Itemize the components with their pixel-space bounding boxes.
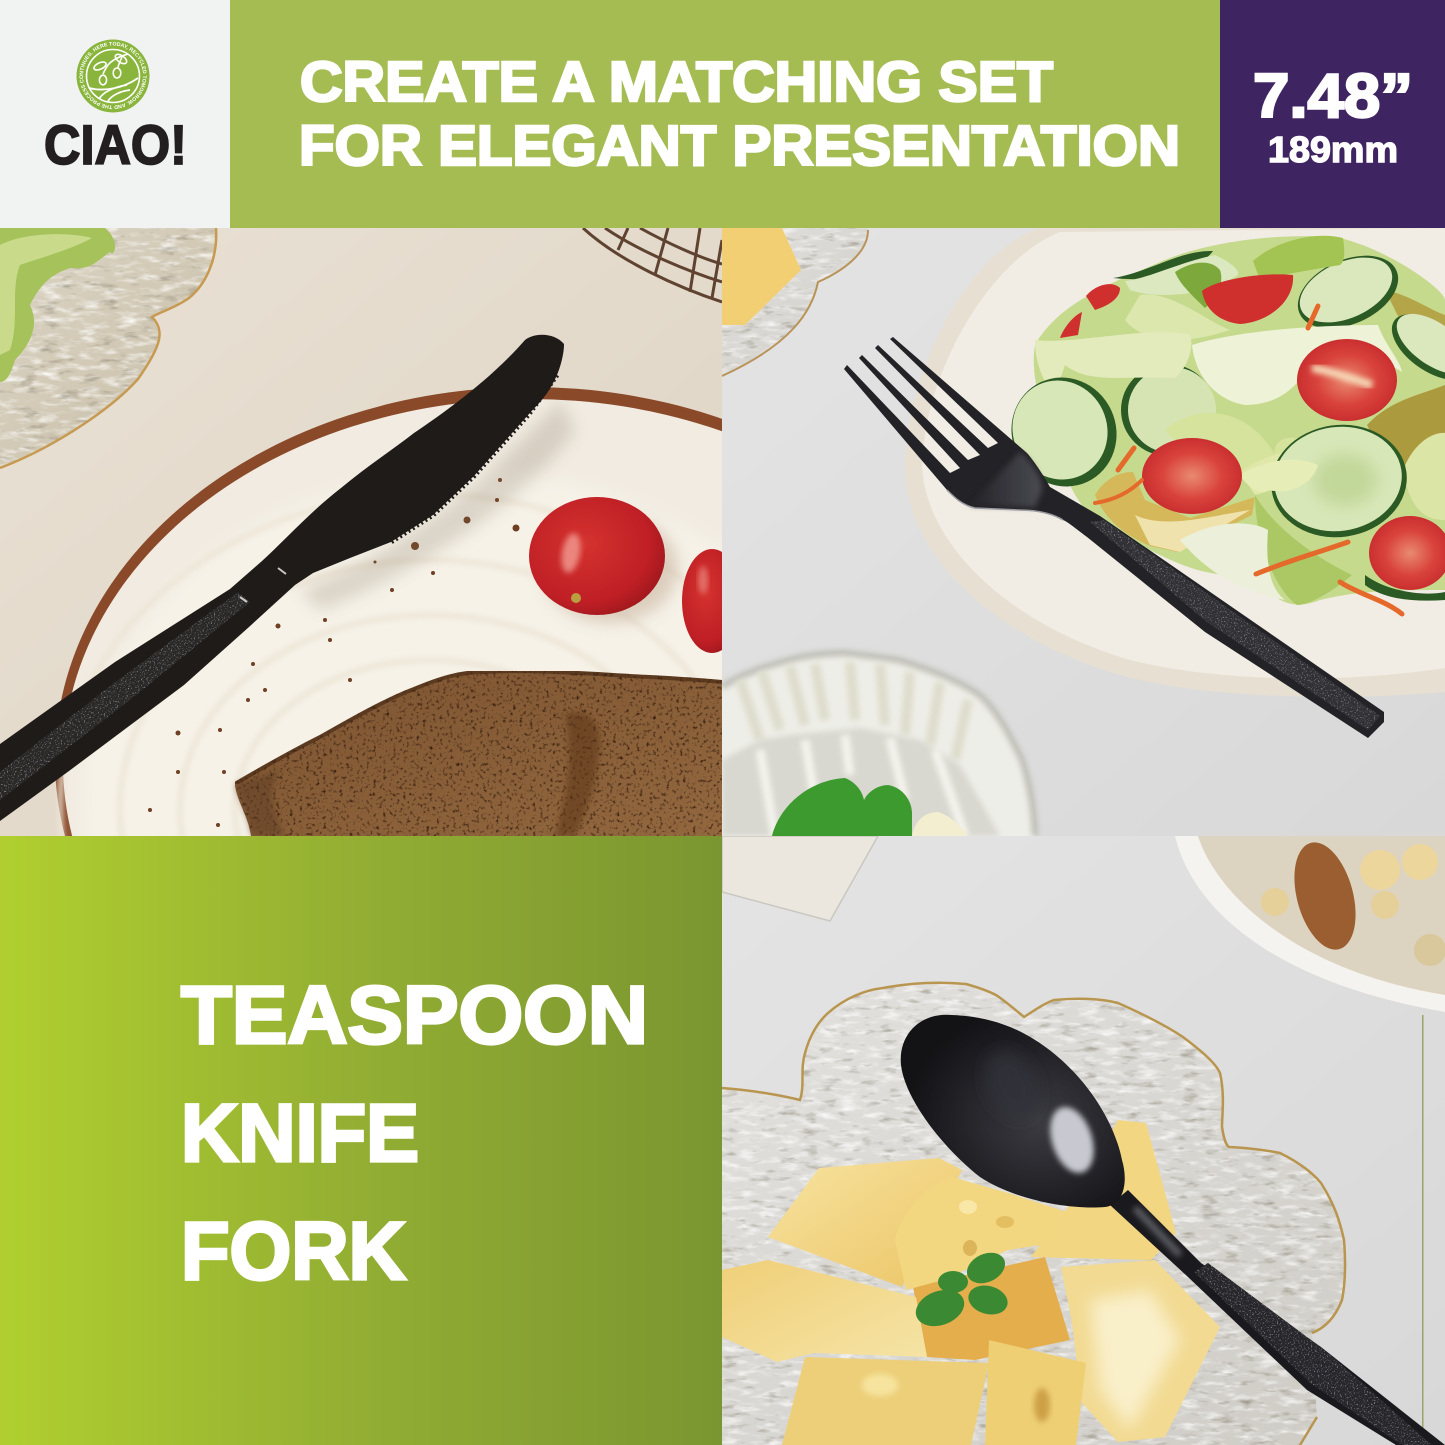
tomatoes [529, 497, 742, 653]
small glass dish with pineapple [722, 228, 868, 376]
lettuce over cucumber [1240, 460, 1318, 492]
item: teaspoon: TEASPOON [181, 970, 648, 1061]
carrot strips [1095, 306, 1402, 614]
oat bowl [1175, 836, 1445, 1012]
length in inches: 7.48” [1253, 62, 1413, 131]
knife shadow [300, 400, 575, 610]
salad plate [905, 228, 1445, 697]
wire basket [583, 228, 722, 302]
knife [0, 335, 564, 821]
headline: FOR ELEGANT PRESENTATION [299, 114, 1180, 178]
glass flower dish [722, 983, 1345, 1445]
cucumbers front [1011, 378, 1407, 538]
photo: knife on plate [0, 228, 722, 836]
salad [994, 236, 1445, 614]
pineapple chunks [722, 1120, 1220, 1445]
item: fork: FORK [181, 1206, 406, 1297]
headline: CREATE A MATCHING SET [300, 50, 1053, 114]
plate [56, 387, 722, 836]
headline [299, 50, 1180, 178]
cherry tomato halves [1060, 274, 1445, 590]
size panel [1220, 0, 1445, 228]
logo panel [0, 0, 230, 228]
spoon [901, 1015, 1445, 1445]
steak [235, 671, 722, 836]
paper card [722, 836, 878, 921]
brand name: CIAO! [44, 113, 187, 176]
mint sprig [916, 1252, 1008, 1326]
cucumbers behind [1113, 241, 1445, 601]
icon: olive branch badge: HERE TODAY, RECYCLED TOMORROW. AND THE PROCESS CONTINUES. [79, 42, 147, 110]
glass plate with lettuce [0, 228, 216, 468]
lettuce leaves [1253, 236, 1344, 280]
list panel [0, 836, 722, 1445]
kiwi [1095, 472, 1255, 552]
glass bowl with mint [722, 653, 1035, 836]
base greens [1034, 236, 1445, 605]
photo: fork and salad [722, 228, 1445, 836]
item: knife: KNIFE [181, 1088, 419, 1179]
length in mm: 189mm [1268, 129, 1398, 170]
photo: spoon with pineapple [722, 836, 1445, 1445]
header band [230, 0, 1220, 228]
fork [844, 337, 1384, 738]
